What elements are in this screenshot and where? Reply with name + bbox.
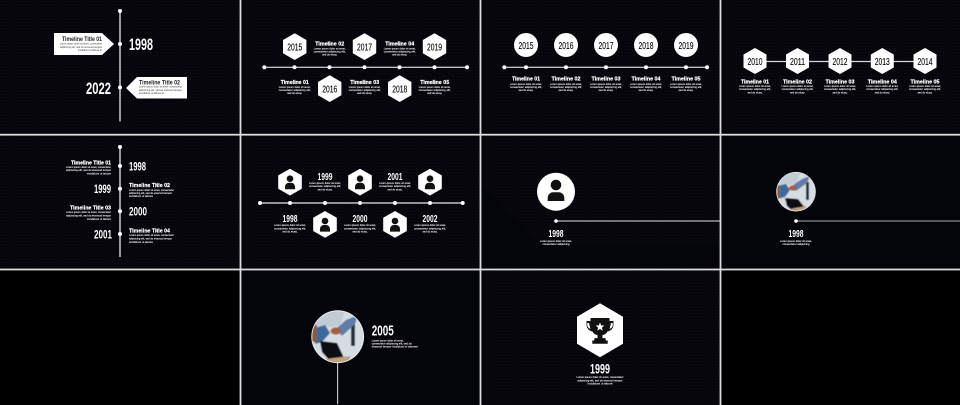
- text: timeline 04: sed do eiusy.: [875, 90, 890, 94]
- text: 2002: Lorem ipsum dolor sit amet,: [414, 223, 446, 227]
- text: timeline 04: consectetur adipiscing elit,: [866, 87, 898, 91]
- panel: vertical timeline with callouts: [54, 9, 187, 122]
- callout: timeline title 02: adipiscing elit, sed do eiusmod tempor: [139, 88, 182, 92]
- text: 1999: sed do eiusy.: [318, 187, 333, 191]
- horizontal line with start dot: [794, 219, 960, 223]
- photo circle: [776, 172, 816, 212]
- text: 2005: eiusmod tempor incididunt ut laboreet: [372, 344, 418, 348]
- horizontal line with start dot: [554, 219, 720, 223]
- text: timeline title 03: Lorem ipsum dolor sit amet, consectetur: [66, 210, 111, 214]
- circle 2015: 2015: [518, 41, 534, 52]
- hexagon 2010: 2010: [748, 57, 763, 68]
- text: timeline 04: Timeline 04: [632, 77, 661, 83]
- text: timeline 04: consectetur adipiscing elit,: [630, 85, 662, 89]
- year 1999: 1999: [94, 182, 111, 196]
- icon: person hexagon 1: [278, 169, 302, 196]
- text: 1998: [274, 213, 306, 233]
- timeline axis: [118, 145, 122, 257]
- text: timeline 05: sed do eiusy.: [678, 88, 694, 92]
- hexagon 2017: [353, 33, 376, 60]
- text: 1998: sed do eiusy.: [282, 229, 298, 233]
- text: timeline 05: [419, 80, 451, 95]
- text: timeline 02: [782, 79, 814, 94]
- text: timeline 01: Lorem ipsum dolor sit amet,: [510, 82, 542, 86]
- circle 2018: [634, 33, 658, 57]
- text: timeline title 04: adipiscing elit, sed do eiusmod tempor: [129, 236, 172, 240]
- text: timeline title 04: incididunt ut labore: [129, 240, 153, 244]
- text: timeline title 03: adipiscing elit, sed do eiusmod tempor: [66, 213, 111, 217]
- text: 1998: consectetur adipiscing: [782, 242, 810, 246]
- text: timeline title 02: [129, 183, 174, 198]
- hexagon 2010: [744, 48, 766, 74]
- text: 2005: Lorem ipsum dolor sit amet,: [372, 338, 404, 342]
- text: 2005: 2005: [372, 323, 394, 340]
- text: timeline 05: Timeline 05: [420, 80, 449, 86]
- text: timeline 01: Timeline 01: [512, 77, 540, 83]
- panel: alternating hexagon timeline: [262, 33, 469, 102]
- text: timeline title 04: Timeline Title 04: [129, 229, 171, 235]
- circle 2017: 2017: [598, 41, 614, 52]
- text: timeline 05: sed do eiusy.: [918, 90, 933, 94]
- text: timeline 03: Timeline 03: [350, 80, 379, 86]
- text: timeline 01: Lorem ipsum dolor sit amet,: [279, 85, 311, 89]
- hexagon 2014: 2014: [918, 57, 933, 68]
- hexagon 2017: 2017: [357, 42, 372, 53]
- text: timeline 03: Timeline 03: [826, 79, 854, 85]
- hexagon 2011: 2011: [790, 57, 805, 68]
- text: timeline 02: Lorem ipsum dolor sit amet,: [550, 82, 582, 86]
- panel: hexagon person timeline: [258, 169, 465, 238]
- text: timeline 04: consectetur adipiscing elit,: [384, 50, 416, 54]
- text: 2001: [379, 171, 411, 191]
- text: 1998: [540, 228, 572, 246]
- text: timeline 02: sed do eiusy.: [322, 52, 337, 56]
- text: timeline 01: consectetur adipiscing elit,: [279, 88, 311, 92]
- text: 2005: consectetur adipiscing elit, sed do: [372, 341, 412, 345]
- text: 2001: sed do eiusy.: [388, 187, 403, 191]
- text: 1998: consectetur adipiscing elit,: [274, 226, 306, 230]
- text: timeline 02: consectetur adipiscing elit,: [314, 50, 346, 54]
- panel: photo milestone: [776, 172, 960, 246]
- text: 1998: 1998: [788, 228, 804, 240]
- text: 1999: 1999: [590, 360, 610, 376]
- text: timeline title 01: adipiscing elit, sed do eiusmod tempor: [66, 168, 111, 172]
- hexagon 2018: [388, 75, 411, 102]
- callout: timeline title 02: incididunt ut labore et: [139, 91, 164, 95]
- text: timeline 05: [670, 77, 702, 92]
- timeline axis: [258, 201, 465, 205]
- text: 2000: Lorem ipsum dolor sit amet,: [344, 223, 376, 227]
- callout: timeline title 01: [54, 33, 114, 55]
- text: timeline 04: Lorem ipsum dolor sit amet,: [630, 82, 662, 86]
- text: 1998: Lorem ipsum dolor sit amet,: [274, 223, 306, 227]
- text: timeline title 02: Timeline Title 02: [129, 183, 170, 189]
- timeline axis: [502, 65, 709, 69]
- text: timeline 02: [550, 77, 582, 92]
- icon: person hexagon 5: [418, 169, 442, 196]
- text: timeline title 01: incididunt ut labore: [87, 171, 111, 175]
- text: 1999: Lorem ipsum dolor sit amet,: [309, 181, 341, 185]
- text: timeline 03: Timeline 03: [592, 77, 620, 83]
- text: timeline 04: [866, 79, 898, 94]
- circle 2017: [594, 33, 618, 57]
- text: timeline 03: sed do eiusy.: [832, 90, 848, 94]
- text: timeline 04: [630, 77, 662, 92]
- callout: timeline title 01: Lorem ipsum dolor sit amet, consectetur: [60, 42, 102, 46]
- text: 2002: sed do eiusy.: [422, 229, 438, 233]
- text: timeline 02: Lorem ipsum dolor sit amet,: [314, 46, 346, 50]
- text: timeline 02: consectetur adipiscing elit,: [550, 85, 582, 89]
- text: timeline 01: sed do eiusy.: [748, 90, 763, 94]
- text: timeline title 03: Timeline Title 03: [70, 206, 111, 212]
- text: timeline 04: Lorem ipsum dolor sit amet,: [384, 46, 416, 50]
- text: timeline 05: Timeline 05: [672, 77, 700, 83]
- hexagon 2016: [318, 75, 341, 102]
- text: 1999: [576, 360, 624, 385]
- text: timeline 05: consectetur adipiscing elit,: [419, 88, 451, 92]
- text: timeline title 04: [129, 229, 174, 244]
- text: 2000: 2000: [352, 213, 368, 225]
- text: 1998: Lorem ipsum dolor sit amet,: [780, 239, 812, 243]
- text: timeline 02: sed do eiusy.: [558, 88, 574, 92]
- text: timeline 03: [349, 80, 381, 95]
- text: 1999: 1999: [318, 171, 333, 183]
- hexagon 2019: [423, 33, 446, 60]
- text: timeline 02: Timeline 02: [552, 77, 580, 83]
- text: 1999: incididunt ut labore: [588, 381, 613, 385]
- text: timeline 03: consectetur adipiscing elit,: [349, 88, 381, 92]
- text: timeline 01: sed do eiusy.: [287, 91, 302, 95]
- text: 2001: consectetur adipiscing elit,: [379, 184, 411, 188]
- text: 2000: sed do eiusy.: [352, 229, 368, 233]
- text: 2001: 2001: [388, 171, 403, 183]
- panel: large photo milestone: [311, 310, 418, 404]
- hexagon 2019: 2019: [427, 42, 442, 53]
- icon: person hexagon 3: [348, 169, 372, 196]
- text: timeline 01: Lorem ipsum dolor sit amet,: [739, 84, 771, 88]
- text: timeline 05: sed do eiusy.: [427, 91, 442, 95]
- text: timeline 03: Lorem ipsum dolor sit amet,: [590, 82, 622, 86]
- hexagon 2016: 2016: [322, 84, 337, 95]
- text: 1999: Lorem ipsum dolor sit amet, consectetur: [576, 375, 624, 379]
- circle 2015: [514, 33, 538, 57]
- text: 2001: Lorem ipsum dolor sit amet,: [379, 181, 411, 185]
- hexagon 2012: [828, 48, 852, 74]
- hexagon 2015: 2015: [287, 42, 302, 53]
- timeline axis: [262, 65, 469, 69]
- panel: connected hexagon timeline: [739, 48, 941, 94]
- text: timeline 01: Timeline 01: [741, 79, 769, 85]
- text: timeline 02: Timeline 02: [315, 42, 344, 48]
- callout: timeline title 01: incididunt ut labore et: [78, 48, 102, 52]
- connector line: [755, 60, 925, 62]
- text: timeline 04: Lorem ipsum dolor sit amet,: [866, 84, 898, 88]
- text: timeline 02: Lorem ipsum dolor sit amet,: [782, 84, 814, 88]
- text: timeline 01: [510, 77, 542, 92]
- icon: person circle: [537, 173, 575, 211]
- panel: person milestone: [537, 173, 720, 246]
- callout: timeline title 02: Timeline Title 02: [139, 80, 181, 86]
- text: 1999: adipiscing elit, sed do eiusmod tempor: [578, 378, 622, 382]
- text: timeline 04: [384, 42, 416, 56]
- circle 2019: [674, 33, 698, 57]
- text: 2000: consectetur adipiscing elit,: [344, 226, 376, 230]
- text: timeline title 04: Lorem ipsum dolor sit amet, consectetur: [129, 233, 174, 237]
- text: timeline 03: Lorem ipsum dolor sit amet,: [824, 84, 856, 88]
- circle 2019: 2019: [678, 41, 694, 52]
- text: 1998: Lorem ipsum dolor sit amet,: [540, 239, 572, 243]
- hexagon 2013: [871, 48, 894, 74]
- hexagon 2011: [786, 48, 809, 74]
- panel: vertical timeline four steps: [66, 145, 174, 257]
- text: 1998: [780, 228, 812, 246]
- hexagon 2013: 2013: [875, 57, 890, 68]
- circle 2016: [554, 33, 578, 57]
- text: timeline title 02: adipiscing elit, sed do eiusmod tempor: [129, 191, 172, 195]
- text: timeline 05: [909, 79, 941, 94]
- photo circle: [311, 310, 364, 363]
- timeline axis: [118, 9, 122, 122]
- text: 2002: [414, 213, 446, 233]
- text: timeline title 02: incididunt ut labore: [129, 194, 153, 198]
- year 1998: 1998: [129, 159, 146, 173]
- text: timeline 02: Timeline 02: [783, 79, 812, 85]
- callout: timeline title 01: Timeline Title 01: [62, 37, 103, 43]
- icon: person hexagon 2: [313, 211, 337, 238]
- text: timeline 03: sed do eiusy.: [598, 88, 614, 92]
- text: 2005: [372, 323, 418, 348]
- callout: timeline title 02: [126, 77, 187, 98]
- text: timeline 03: [590, 77, 622, 92]
- text: timeline 04: Timeline 04: [385, 42, 415, 48]
- callout: timeline title 01: adipiscing elit, sed do eiusmod tempor: [60, 45, 102, 49]
- icon: person hexagon 4: [383, 211, 407, 238]
- panel: circle timeline: [502, 33, 709, 92]
- text: timeline title 03: incididunt ut labore: [87, 217, 111, 221]
- text: timeline title 01: [66, 160, 111, 175]
- text: 2002: consectetur adipiscing elit,: [414, 226, 446, 230]
- circle 2016: 2016: [558, 41, 574, 52]
- text: 2002: 2002: [422, 213, 438, 225]
- callout: timeline title 02: Lorem ipsum dolor sit amet, consectetur: [139, 84, 182, 88]
- text: timeline 02: sed do eiusy.: [790, 90, 805, 94]
- text: 1998: 1998: [282, 213, 298, 225]
- text: timeline 01: consectetur adipiscing elit,: [739, 87, 771, 91]
- year 2000: 2000: [129, 205, 147, 219]
- text: timeline 05: consectetur adipiscing elit,: [670, 85, 702, 89]
- hexagon 2014: [914, 48, 936, 74]
- text: 1999: consectetur adipiscing elit,: [309, 184, 341, 188]
- text: timeline 05: Lorem ipsum dolor sit amet,: [909, 84, 941, 88]
- text: timeline 02: [314, 42, 346, 56]
- icon: trophy hexagon: [577, 303, 623, 357]
- text: timeline 03: consectetur adipiscing elit,: [590, 85, 622, 89]
- text: timeline 05: Timeline 05: [910, 79, 940, 85]
- year 2022: 2022: [86, 80, 111, 98]
- text: 1998: consectetur adipiscing: [542, 242, 570, 246]
- text: timeline 04: sed do eiusy.: [638, 88, 654, 92]
- text: timeline title 01: Timeline Title 01: [71, 160, 111, 166]
- text: timeline 05: Lorem ipsum dolor sit amet,: [419, 85, 451, 89]
- circle 2018: 2018: [638, 41, 654, 52]
- year 2001: 2001: [94, 227, 112, 241]
- text: 1998: 1998: [548, 228, 564, 240]
- text: timeline title 03: [66, 206, 111, 221]
- text: timeline 04: sed do eiusy.: [392, 52, 407, 56]
- text: timeline 01: consectetur adipiscing elit,: [510, 85, 542, 89]
- text: timeline 02: consectetur adipiscing elit,: [782, 87, 814, 91]
- text: 1999: [309, 171, 341, 191]
- text: timeline 05: consectetur adipiscing elit,: [909, 87, 941, 91]
- text: 2000: [344, 213, 376, 233]
- text: timeline 03: sed do eiusy.: [357, 91, 372, 95]
- text: timeline 01: sed do eiusy.: [518, 88, 534, 92]
- text: timeline 01: [739, 79, 771, 94]
- text: timeline title 01: Lorem ipsum dolor sit amet, consectetur: [66, 165, 111, 169]
- vertical line: [337, 362, 339, 404]
- text: timeline title 02: Lorem ipsum dolor sit amet, consectetur: [129, 188, 174, 192]
- hexagon 2018: 2018: [392, 84, 407, 95]
- text: timeline 05: Lorem ipsum dolor sit amet,: [670, 82, 702, 86]
- year 1998: 1998: [129, 36, 153, 54]
- text: timeline 01: Timeline 01: [281, 80, 309, 86]
- panel: trophy milestone: [576, 303, 624, 385]
- text: timeline 03: consectetur adipiscing elit,: [824, 87, 856, 91]
- text: timeline 01: [279, 80, 311, 95]
- hexagon 2015: [283, 33, 306, 60]
- text: timeline 04: Timeline 04: [868, 79, 898, 85]
- text: timeline 03: Lorem ipsum dolor sit amet,: [349, 85, 381, 89]
- text: timeline 03: [824, 79, 856, 94]
- hexagon 2012: 2012: [832, 57, 848, 68]
